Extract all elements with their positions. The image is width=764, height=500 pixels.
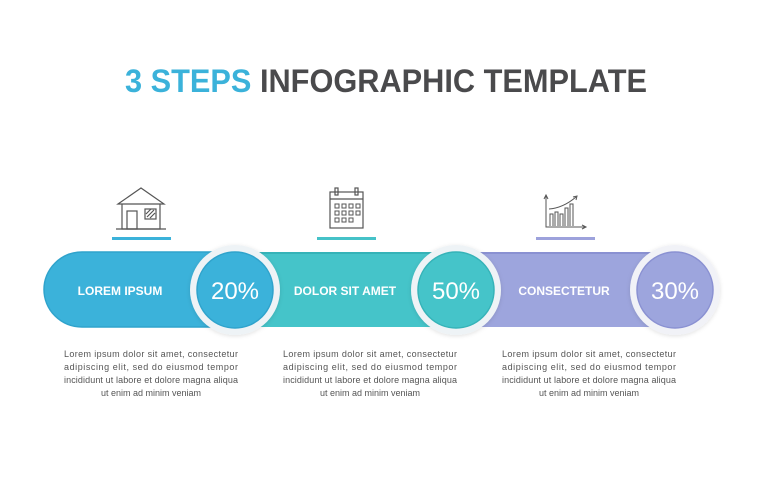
icon underline blue <box>112 237 171 240</box>
text block 2: adipiscing elit, sed do eiusmod tempor <box>283 362 457 372</box>
text block 1: incididunt ut labore et dolore magna aliqua <box>64 375 238 385</box>
icon underline purple <box>536 237 595 240</box>
circle 30% <box>630 245 720 335</box>
text block 1: Lorem ipsum dolor sit amet, consectetur <box>64 349 238 359</box>
label: dolor sit amet: DOLOR SIT AMET <box>294 284 397 298</box>
circle 50%: 50% <box>432 278 480 305</box>
icon: calendar <box>330 188 363 228</box>
label: consectetur: CONSECTETUR <box>518 284 610 298</box>
title: 3 STEPS INFOGRAPHIC TEMPLATE <box>125 63 647 99</box>
icon: chart <box>544 195 586 229</box>
icon: house <box>116 188 166 229</box>
bar segments <box>44 252 680 327</box>
text block 3: Lorem ipsum dolor sit amet, consectetur <box>502 349 676 359</box>
text block 1: adipiscing elit, sed do eiusmod tempor <box>64 362 238 372</box>
circle 20% <box>190 245 280 335</box>
text block 3: adipiscing elit, sed do eiusmod tempor <box>502 362 676 372</box>
text block 3: ut enim ad minim veniam <box>539 388 639 398</box>
text block 2 <box>283 349 457 398</box>
text block 2: incididunt ut labore et dolore magna aliqua <box>283 375 457 385</box>
icon underline teal <box>317 237 376 240</box>
circle 30%: 30% <box>651 278 699 305</box>
text block 2: Lorem ipsum dolor sit amet, consectetur <box>283 349 457 359</box>
text block 3 <box>502 349 676 398</box>
circle 50% <box>411 245 501 335</box>
text block 1: ut enim ad minim veniam <box>101 388 201 398</box>
label: lorem ipsum: LOREM IPSUM <box>78 284 162 298</box>
text block 1 <box>64 349 238 398</box>
text block 3: incididunt ut labore et dolore magna aliqua <box>502 375 676 385</box>
circle 20%: 20% <box>211 278 259 305</box>
text block 2: ut enim ad minim veniam <box>320 388 420 398</box>
